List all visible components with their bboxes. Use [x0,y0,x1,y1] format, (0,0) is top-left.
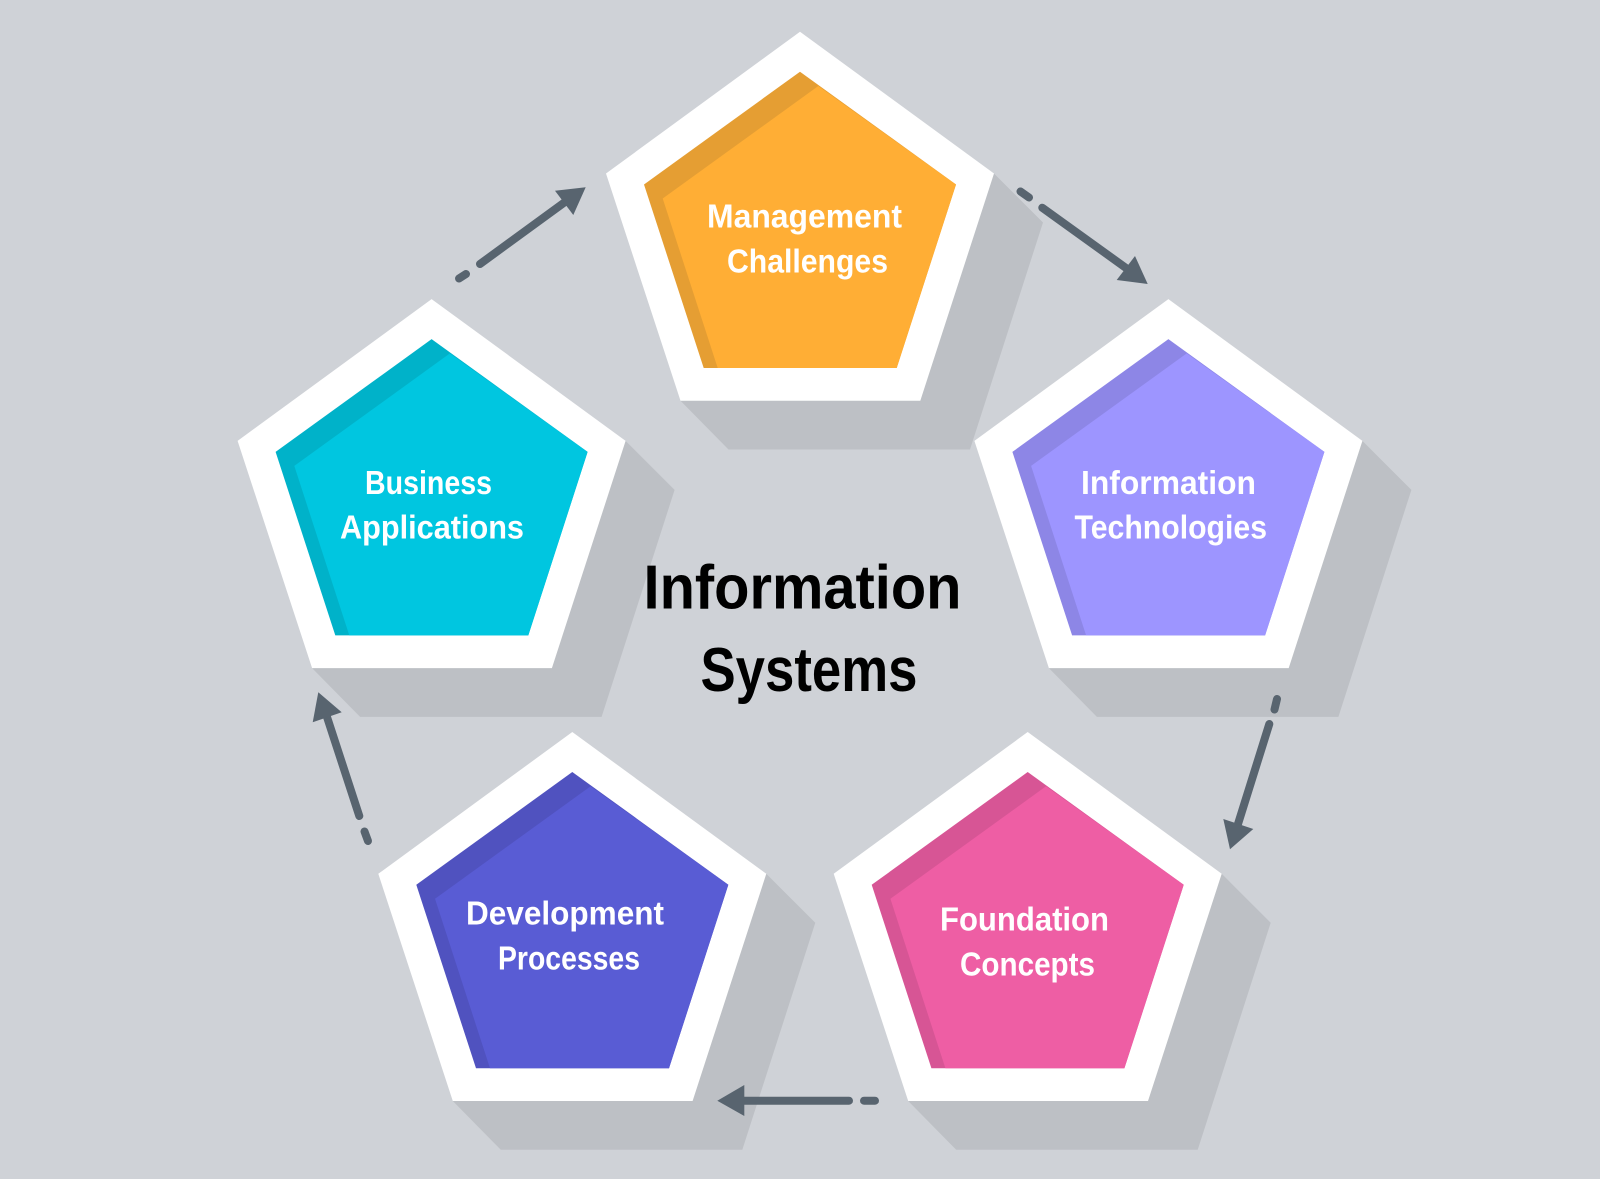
white pentagon frame [606,32,994,401]
panel: Management Challenges [606,32,1043,449]
white pentagon frame [974,299,1362,668]
label: Foundation [940,901,1109,938]
label [340,464,524,545]
colour face [663,86,956,368]
dark inner strip [1012,339,1324,635]
title: Systems [700,636,918,705]
shadow [908,874,1271,1150]
colour face [890,786,1184,1068]
title: Information [644,553,962,622]
label: Processes [498,939,640,976]
label: Technologies [1074,509,1267,546]
colour face [1031,353,1324,635]
label: Development [466,894,664,931]
dark inner strip [872,772,1184,1068]
colour face [294,353,588,635]
shadow [680,174,1043,450]
label: Applications [340,508,524,545]
label: Business [365,464,492,501]
label [466,894,664,976]
title [644,553,962,705]
white pentagon frame [238,299,626,668]
label: Challenges [727,243,888,280]
white pentagon frame [834,732,1222,1101]
shadow [312,441,675,717]
label: Concepts [960,945,1095,982]
dark inner strip [644,72,956,368]
shadow [1049,441,1411,717]
label [940,901,1109,982]
panel: Development Processes [378,732,815,1150]
white pentagon frame [378,732,766,1101]
label [1074,464,1267,546]
arrow: Foundation Concepts to Development Processes [717,1085,875,1116]
arrow: Management Challenges to Information Technologies [1020,192,1148,284]
dark inner strip [276,339,588,635]
arrow: Information Technologies to Foundation Concepts [1223,699,1277,849]
shadow [453,874,815,1150]
panel: Business Applications [238,299,675,717]
panel: Information Technologies [974,299,1411,717]
arrow: Business Applications to Management Challenges [459,187,586,278]
arrow: Development Processes to Business Applications [313,692,368,841]
panel: Foundation Concepts [834,732,1271,1150]
label: Management [707,197,902,234]
dark inner strip [416,772,728,1068]
colour face [435,786,728,1068]
label [707,197,902,280]
label: Information [1081,464,1256,501]
